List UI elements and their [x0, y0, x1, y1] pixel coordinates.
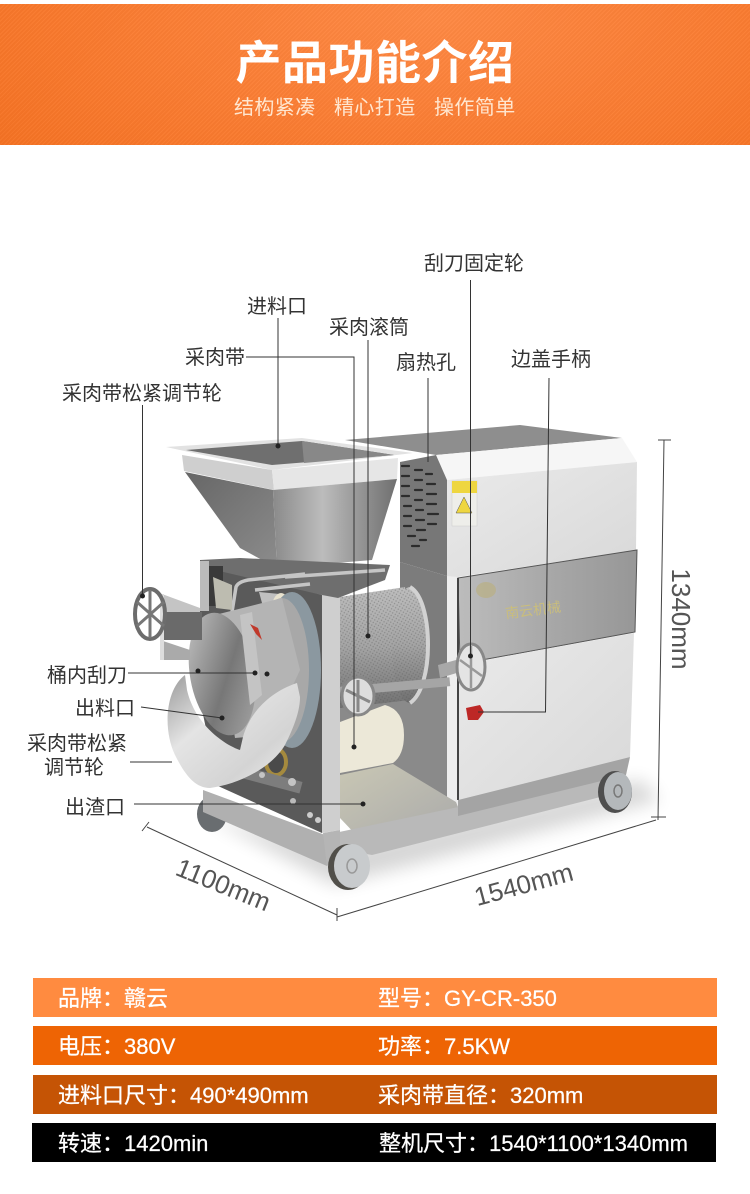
subtitle — [234, 91, 516, 120]
subtitle: 结构紧凑 — [234, 91, 316, 120]
vent holes — [402, 466, 438, 546]
leader: inner blade — [128, 672, 255, 674]
spec row: brand and model: 型号：GY-CR-350 — [378, 986, 557, 1011]
right base rail — [325, 772, 628, 866]
tension handwheel left — [135, 589, 202, 660]
subtitle: 操作简单 — [434, 91, 516, 120]
pressure rollers — [213, 577, 291, 632]
barrel drum — [340, 587, 428, 708]
spec row: speed and overall size: 转速：1420min — [58, 1131, 208, 1156]
brand mark: 南云机械 — [504, 599, 562, 621]
spec row: brand and model: 品牌：赣云 — [58, 986, 168, 1011]
red side cover handle — [466, 705, 484, 720]
lower side panel — [458, 633, 634, 800]
callout dots — [140, 444, 473, 806]
spec row: brand and model — [33, 978, 717, 1017]
label: feed inlet: 进料口 — [247, 295, 307, 318]
header banner — [0, 4, 750, 145]
label: inner blade: 桶内刮刀 — [47, 664, 127, 687]
spec row: voltage and power — [33, 1026, 717, 1065]
handwheel right — [438, 644, 485, 690]
spec row: speed and overall size: 整机尺寸：1540*1100*1340mm — [379, 1131, 688, 1156]
label: drum: 采肉滚筒 — [329, 316, 409, 339]
drive gears — [240, 749, 321, 823]
label: vent holes: 扇热孔 — [396, 351, 456, 374]
front wheel — [328, 844, 370, 890]
label: blade wheel: 刮刀固定轮 — [424, 252, 524, 275]
dimension lines — [142, 440, 671, 921]
inner barrel cone — [180, 598, 300, 741]
width dimension line — [337, 820, 656, 921]
hopper — [166, 438, 413, 568]
spec row: inlet and belt size: 采肉带直径：320mm — [378, 1083, 583, 1108]
floor shadow — [205, 780, 660, 885]
title: 产品功能介绍 — [236, 27, 514, 93]
spec row: voltage and power: 功率：7.5KW — [378, 1034, 510, 1059]
steel nameplate — [458, 550, 637, 664]
leader: belt tension wheel lower — [130, 761, 172, 763]
top plate and guide rods — [200, 558, 390, 612]
frame post — [322, 592, 340, 833]
chassis front wall — [200, 560, 322, 833]
leader: cover handle — [478, 378, 549, 712]
spec row: inlet and belt size — [33, 1075, 717, 1114]
cabinet — [340, 425, 637, 808]
leader: blade wheel — [470, 280, 472, 656]
label: cover handle: 边盖手柄 — [511, 348, 591, 371]
depth dimension line — [142, 822, 337, 915]
spec row: voltage and power: 电压：380V — [58, 1034, 175, 1059]
base tray — [340, 764, 460, 837]
leader: belt tension wheel upper — [142, 405, 144, 596]
callout labels — [27, 252, 591, 819]
discharge chute — [168, 675, 300, 788]
callouts — [128, 280, 549, 804]
leader: meat belt — [246, 357, 354, 747]
label: outlet: 出料口 — [75, 697, 135, 720]
subtitle: 精心打造 — [334, 91, 416, 120]
height dimension line — [651, 440, 671, 820]
left rear wheel — [197, 796, 227, 832]
spec row: inlet and belt size: 进料口尺寸：490*490mm — [58, 1083, 309, 1108]
right rear wheel — [598, 771, 632, 813]
warning label — [452, 481, 477, 526]
label: residue outlet: 出渣口 — [65, 796, 125, 819]
dimension: height: 1340mm — [666, 568, 696, 670]
left chassis rail — [203, 790, 327, 866]
dimension: width: 1540mm — [471, 857, 576, 912]
leader: residue outlet — [134, 803, 363, 805]
flange ring — [255, 592, 321, 748]
handwheel middle — [340, 677, 450, 715]
label: belt tension wheel lower: 采肉带松紧 — [27, 732, 127, 755]
leader: outlet — [141, 707, 222, 718]
meat belt roller — [340, 705, 404, 773]
label: belt tension wheel lower line 2: 调节轮 — [44, 756, 104, 779]
spec row: speed and overall size — [32, 1123, 716, 1162]
machine — [135, 425, 660, 890]
dimension: depth: 1100mm — [172, 852, 275, 917]
leader: drum — [367, 340, 369, 636]
leader: vent holes — [427, 378, 429, 462]
label: belt tension wheel: 采肉带松紧调节轮 — [62, 382, 222, 405]
leader: feed inlet — [277, 318, 279, 446]
label: meat belt: 采肉带 — [185, 346, 245, 369]
